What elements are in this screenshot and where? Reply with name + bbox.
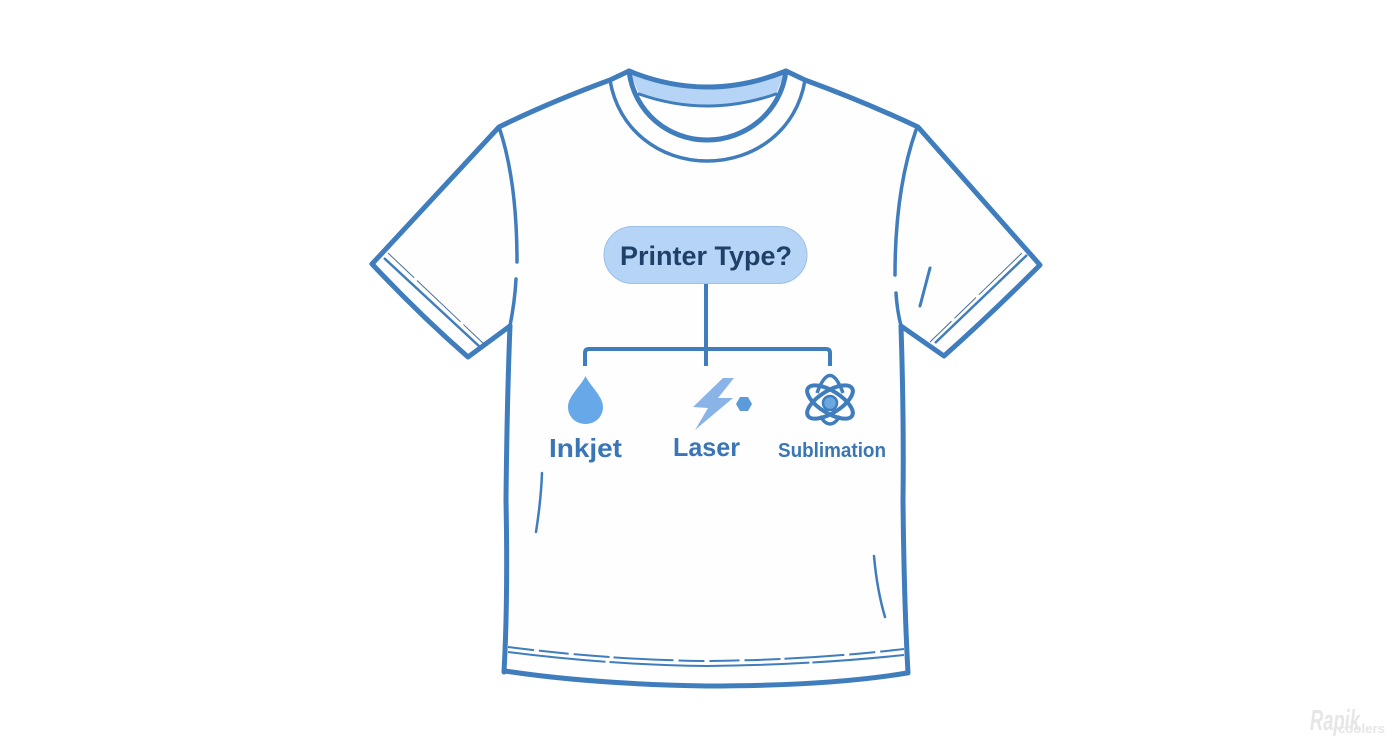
- icon: lightning bolt: [693, 378, 734, 430]
- icon: ink drop: [568, 376, 603, 424]
- bottom hem: [505, 671, 907, 686]
- right body crease: [874, 556, 885, 617]
- option: Laser: [673, 378, 752, 462]
- collar outer curve: [610, 80, 805, 161]
- left armhole seam: [499, 127, 517, 326]
- hem stitching: [508, 647, 904, 666]
- left sleeve stitching: [384, 253, 485, 347]
- icon: atom: [802, 376, 858, 425]
- right body side: [901, 326, 908, 673]
- label: Laser: Laser: [673, 432, 740, 462]
- right sleeve crease: [920, 268, 930, 306]
- t-shirt illustration: [372, 71, 1040, 686]
- left shoulder and sleeve outline: [372, 71, 629, 357]
- icon: hexagon: [736, 397, 752, 411]
- collar band lower line: [639, 94, 776, 106]
- right sleeve stitching: [930, 251, 1027, 343]
- collar inner band: [630, 72, 785, 106]
- right armhole seam: [895, 130, 916, 326]
- heading pill: Printer Type?: Printer Type?: [620, 241, 792, 271]
- left body crease: [536, 473, 542, 532]
- label: Sublimation: Sublimation: [778, 440, 886, 462]
- collar top edge: [629, 71, 786, 87]
- shirt body fill: [372, 71, 1040, 686]
- option: Sublimation: [778, 376, 886, 462]
- connector lines: [585, 284, 830, 366]
- option: Inkjet: [549, 376, 622, 463]
- collar inner curve: [629, 71, 786, 140]
- heading pill: Printer Type?: [604, 226, 807, 284]
- left body side: [504, 326, 510, 672]
- watermark: Rapik: [1310, 705, 1361, 737]
- right shoulder and sleeve outline: [786, 71, 1040, 356]
- watermark: coolers: [1338, 721, 1385, 736]
- label: Inkjet: Inkjet: [549, 433, 622, 463]
